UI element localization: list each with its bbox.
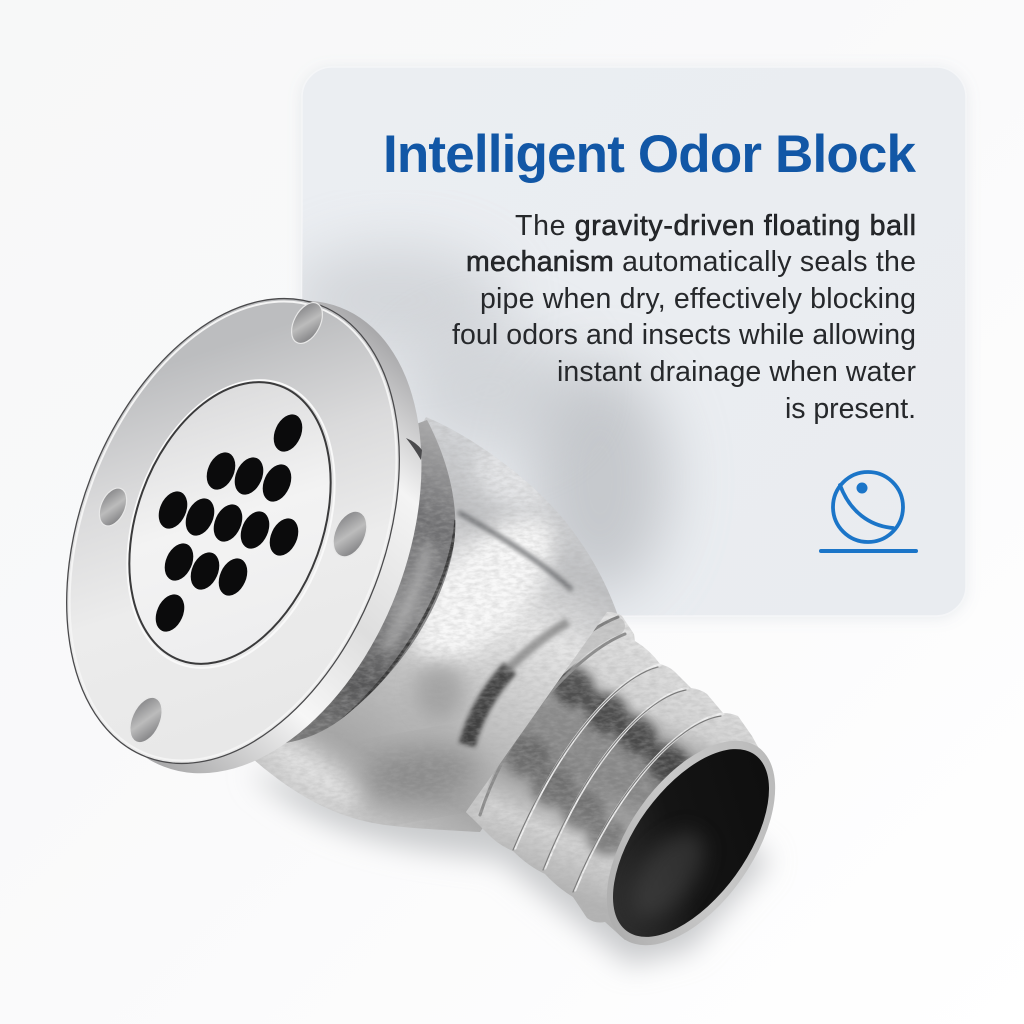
floor shadow under product [250, 760, 770, 965]
body text: pipe when dry, effectively blocking [480, 283, 916, 315]
dark reflection patches [549, 661, 694, 786]
body text [452, 210, 916, 425]
flange face [4, 251, 462, 811]
weld collar [286, 420, 456, 743]
pipe body [255, 417, 617, 832]
drain holes [150, 410, 308, 636]
infographic canvas [66, 54, 973, 978]
body text: foul odors and insects while allowing [452, 319, 916, 351]
perforated strainer disc [90, 351, 372, 697]
flange rim [19, 252, 485, 822]
icon: floating ball on line [821, 472, 916, 551]
body text: mechanism automatically seals the [466, 246, 916, 278]
product: elbow drain fitting [66, 298, 776, 946]
pipe end opening [573, 712, 809, 974]
heading: Intelligent Odor Block [383, 125, 917, 184]
body text: is present. [785, 393, 916, 425]
panel: glass text card [285, 67, 966, 616]
body text: The gravity-driven floating ball [515, 210, 916, 242]
hose barb [466, 612, 758, 940]
countersunk screw holes [94, 297, 373, 748]
body text: instant drainage when water [557, 356, 916, 388]
